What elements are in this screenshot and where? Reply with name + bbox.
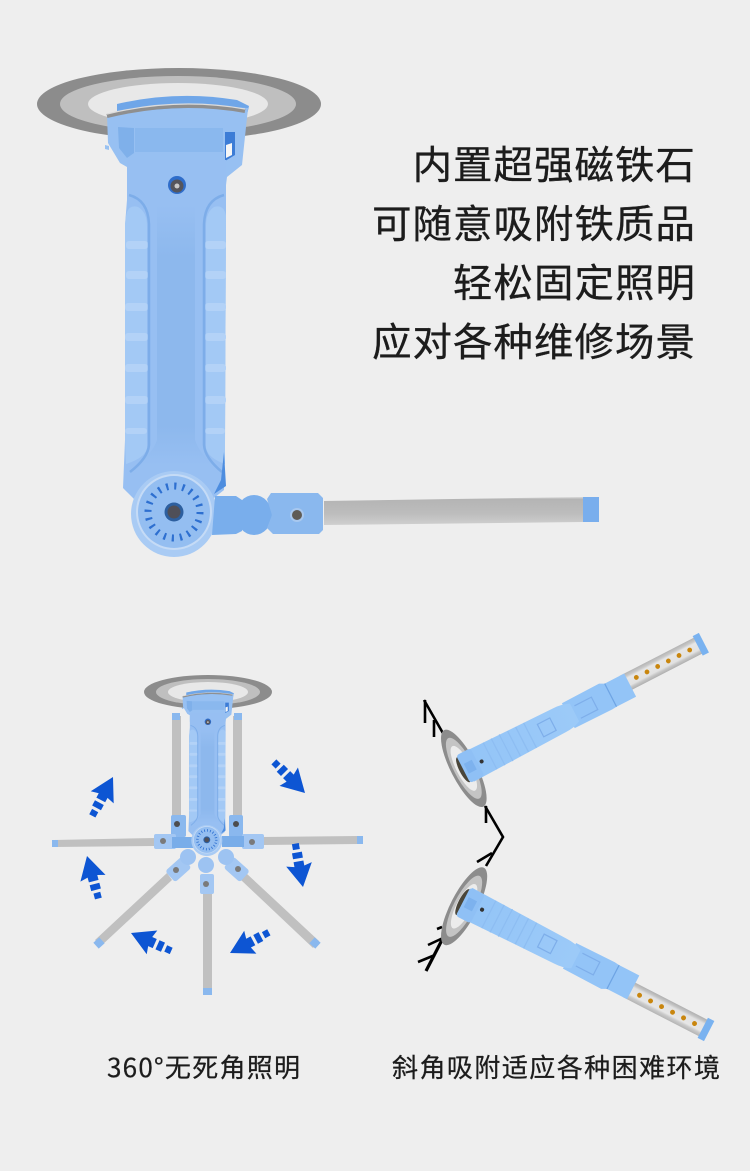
right grip (206, 206, 226, 464)
arrow: upper left (81, 771, 124, 822)
LEDs (633, 647, 693, 681)
arrow: upper right (265, 753, 314, 802)
rod down right (218, 849, 321, 949)
caption: 360 degree: 360°无死角照明 (107, 1048, 300, 1085)
disc (432, 862, 496, 951)
caption: angled mounting: 斜角吸附适应各种困难环境 (392, 1048, 720, 1085)
head button (464, 897, 477, 911)
angled flashlight: lower (432, 862, 728, 1070)
main magnetic disc (37, 68, 321, 140)
light bar (620, 637, 703, 692)
rod up left (171, 713, 186, 837)
small flashlight at centre of rotation (182, 690, 234, 856)
main feature copy: 可随意吸附铁质品 (372, 193, 696, 250)
light bar rod (324, 497, 583, 525)
rod left (52, 834, 194, 849)
light bar (622, 980, 708, 1036)
angled flashlight: upper (433, 606, 724, 813)
hinged arm with light bar (212, 493, 599, 535)
rod up right (229, 713, 243, 837)
arm screw (290, 508, 304, 522)
wall lines with hatching (418, 700, 503, 971)
collar (563, 943, 640, 1002)
hinge joint (212, 495, 272, 535)
disc (433, 724, 495, 813)
center channel (135, 205, 215, 465)
handle (458, 888, 583, 973)
360 degree rods (52, 713, 363, 995)
end cap (693, 633, 709, 656)
rod down (198, 857, 214, 995)
arrow: left (74, 853, 111, 902)
screw (479, 759, 484, 764)
main flashlight body (105, 96, 249, 557)
rotation arrows (74, 753, 316, 964)
top screw (168, 176, 186, 194)
handle ribs and details (482, 901, 620, 992)
handle ribs and details (483, 681, 617, 769)
LEDs (636, 992, 698, 1027)
flashlight head (105, 96, 249, 185)
rod right (222, 834, 363, 849)
body shadow (214, 452, 226, 494)
main feature copy: 应对各种维修场景 (372, 311, 696, 368)
head (456, 748, 484, 783)
grip grooves (129, 195, 224, 472)
end cap (698, 1018, 714, 1041)
head (456, 887, 485, 923)
grip ribs (125, 241, 226, 434)
arrow: lower right (224, 921, 275, 964)
small magnetic disc (144, 675, 272, 709)
screw (479, 907, 485, 912)
head button (464, 760, 477, 774)
left grip (125, 206, 147, 464)
main feature copy: 轻松固定照明 (453, 252, 696, 309)
arrow: right (283, 841, 316, 889)
handle silhouette (123, 160, 226, 505)
pivot knob (131, 471, 217, 557)
rod down left (93, 849, 196, 949)
main feature copy: 内置超强磁铁石 (413, 134, 696, 191)
collar (562, 671, 636, 729)
rod end cap (583, 497, 599, 522)
arm block (267, 493, 323, 534)
arrow: lower left (126, 921, 176, 963)
main feature copy (372, 134, 696, 368)
handle (460, 699, 582, 782)
